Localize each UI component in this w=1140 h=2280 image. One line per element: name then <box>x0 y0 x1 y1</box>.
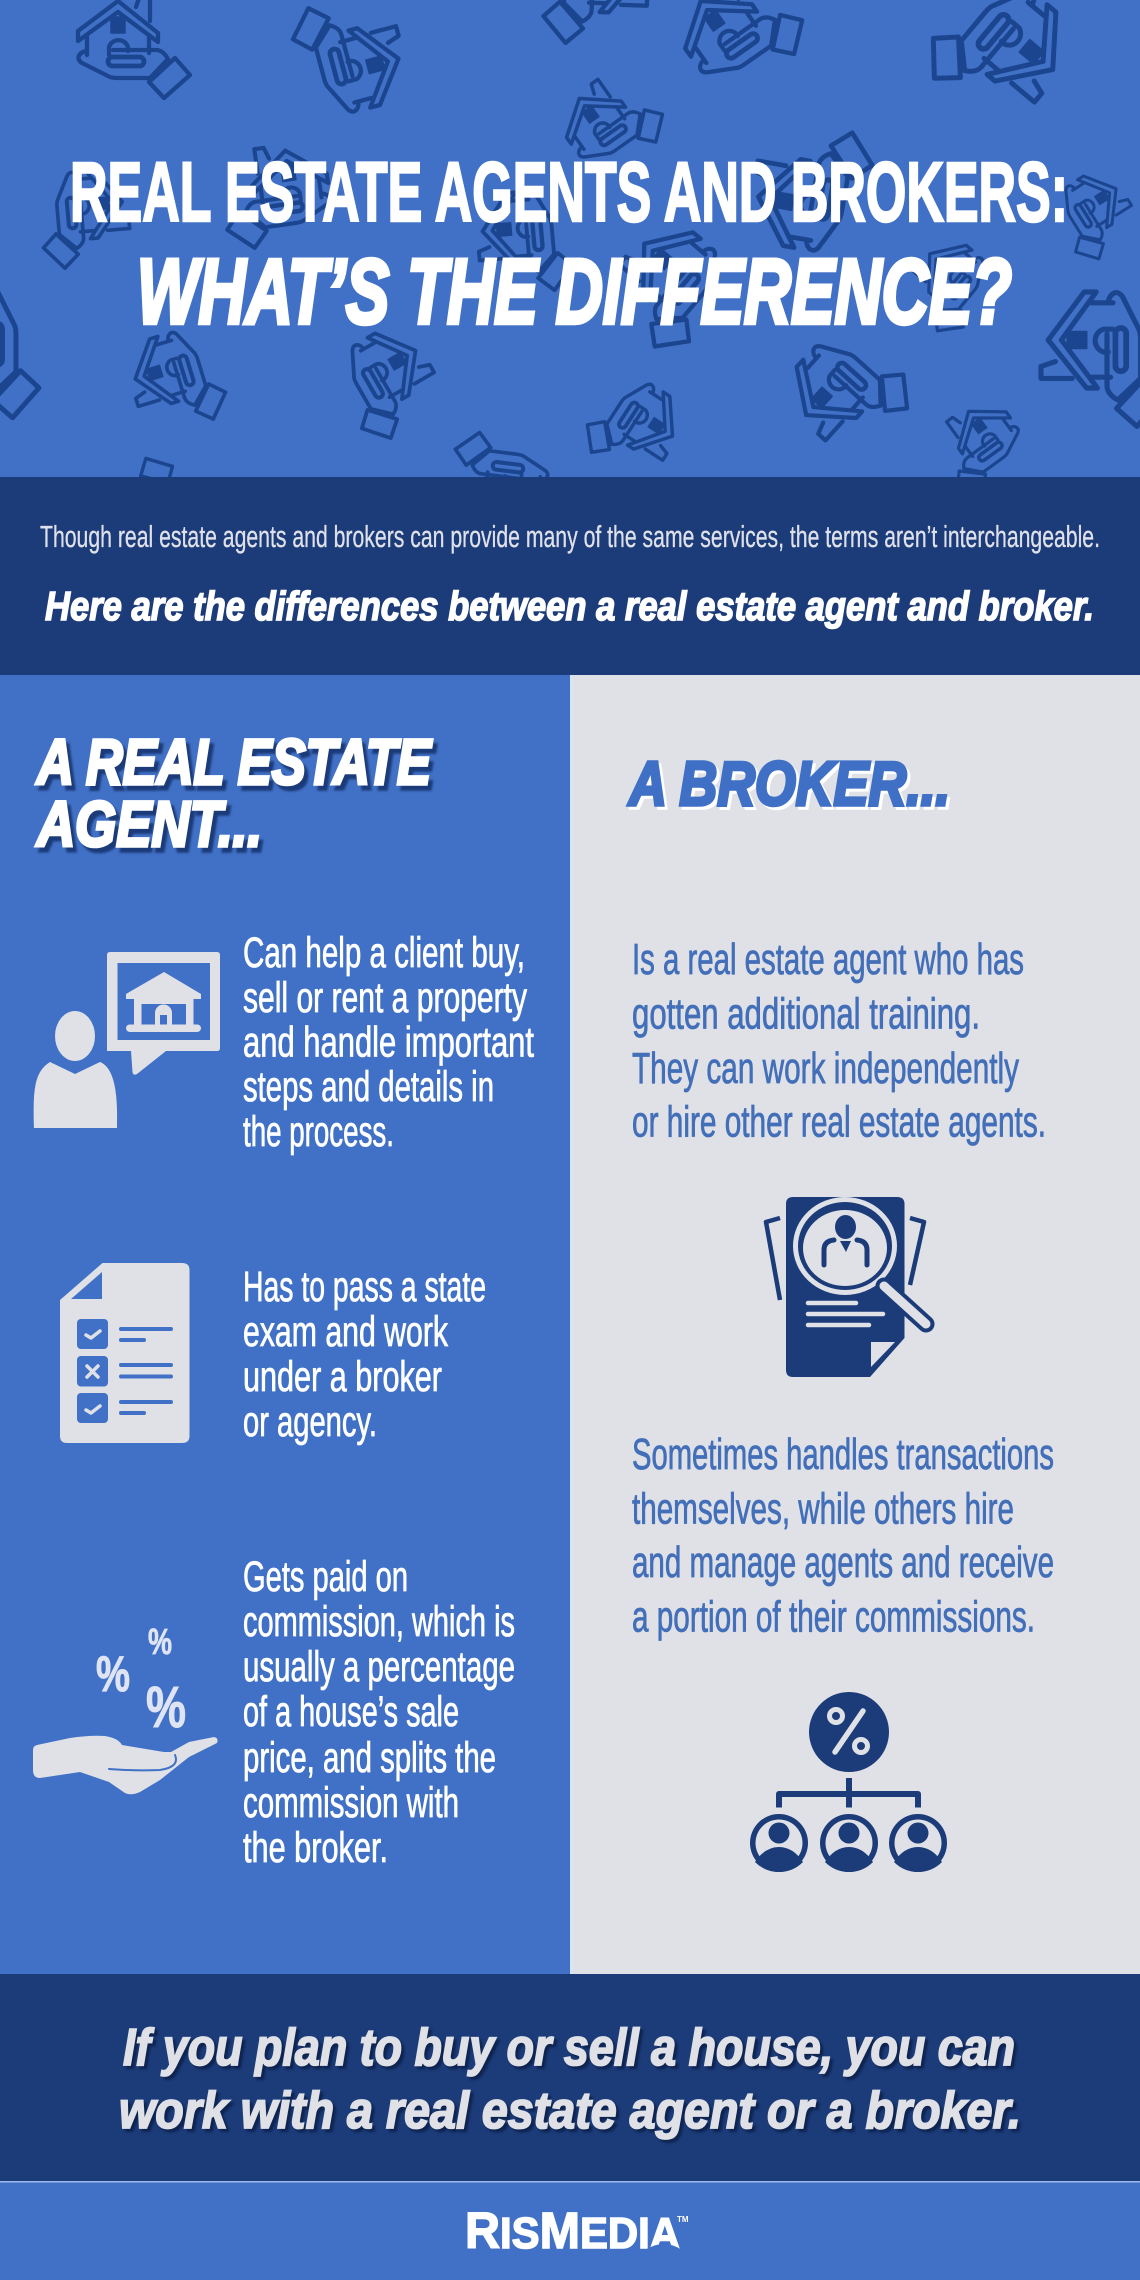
agent heading: AGENT... <box>35 788 262 860</box>
agent heading <box>35 726 433 860</box>
agent text 3: the broker. <box>243 1824 388 1872</box>
panel: real estate agent <box>0 675 570 1974</box>
icon: hand with percent signs: % <box>148 1621 172 1662</box>
icon: hand with percent signs: % <box>146 1675 186 1740</box>
agent text 1: steps and details in <box>243 1063 494 1111</box>
broker text 2 <box>632 1430 1054 1642</box>
agent text 1: sell or rent a property <box>243 974 527 1022</box>
broker heading: A BROKER... <box>627 750 950 819</box>
closing band <box>0 1974 1140 2181</box>
icon: hand with percent signs <box>33 1621 218 1794</box>
header background <box>0 0 1140 477</box>
agent text 2: Has to pass a state <box>243 1263 486 1311</box>
agent text 3: price, and splits the <box>243 1734 496 1782</box>
logo: RISMedia: RISMEDIA <box>465 2202 680 2259</box>
icon: hand with percent signs: % <box>96 1646 130 1702</box>
broker text 1 <box>632 935 1046 1146</box>
background pattern: house in hand icons <box>0 0 1140 568</box>
agent text 1: and handle important <box>243 1018 534 1066</box>
intro band <box>0 477 1140 675</box>
agent text 2: or agency. <box>243 1398 377 1446</box>
logo: RISMedia: TM <box>677 2215 689 2224</box>
icon: document with magnifying glass <box>766 1197 926 1377</box>
agent text 1: the process. <box>243 1108 394 1156</box>
agent text 1: Can help a client buy, <box>243 929 525 977</box>
agent text 3: Gets paid on <box>243 1553 408 1601</box>
agent text 2: under a broker <box>243 1353 442 1401</box>
icon: agent with house speech bubble <box>34 952 220 1128</box>
agent text 1 <box>243 929 534 1156</box>
agent heading: A REAL ESTATE <box>35 726 433 798</box>
broker text 1: gotten additional training. <box>632 990 980 1038</box>
closing statement: If you plan to buy or sell a house, you can <box>123 2019 1015 2077</box>
agent text 3: of a house’s sale <box>243 1688 459 1736</box>
panel: broker <box>570 675 1140 1974</box>
agent text 2 <box>243 1263 486 1446</box>
agent text 3: commission with <box>243 1779 459 1827</box>
agent text 3: usually a percentage <box>243 1643 515 1691</box>
title <box>70 145 1068 343</box>
agent text 2: exam and work <box>243 1308 448 1356</box>
agent text 3: commission, which is <box>243 1598 515 1646</box>
icon: commission organization chart <box>750 1692 947 1872</box>
agent text 3 <box>243 1553 515 1872</box>
icon: checklist document <box>60 1263 190 1443</box>
footer band <box>0 2181 1140 2280</box>
closing statement <box>119 2019 1021 2140</box>
closing statement: work with a real estate agent or a broker. <box>119 2082 1021 2140</box>
